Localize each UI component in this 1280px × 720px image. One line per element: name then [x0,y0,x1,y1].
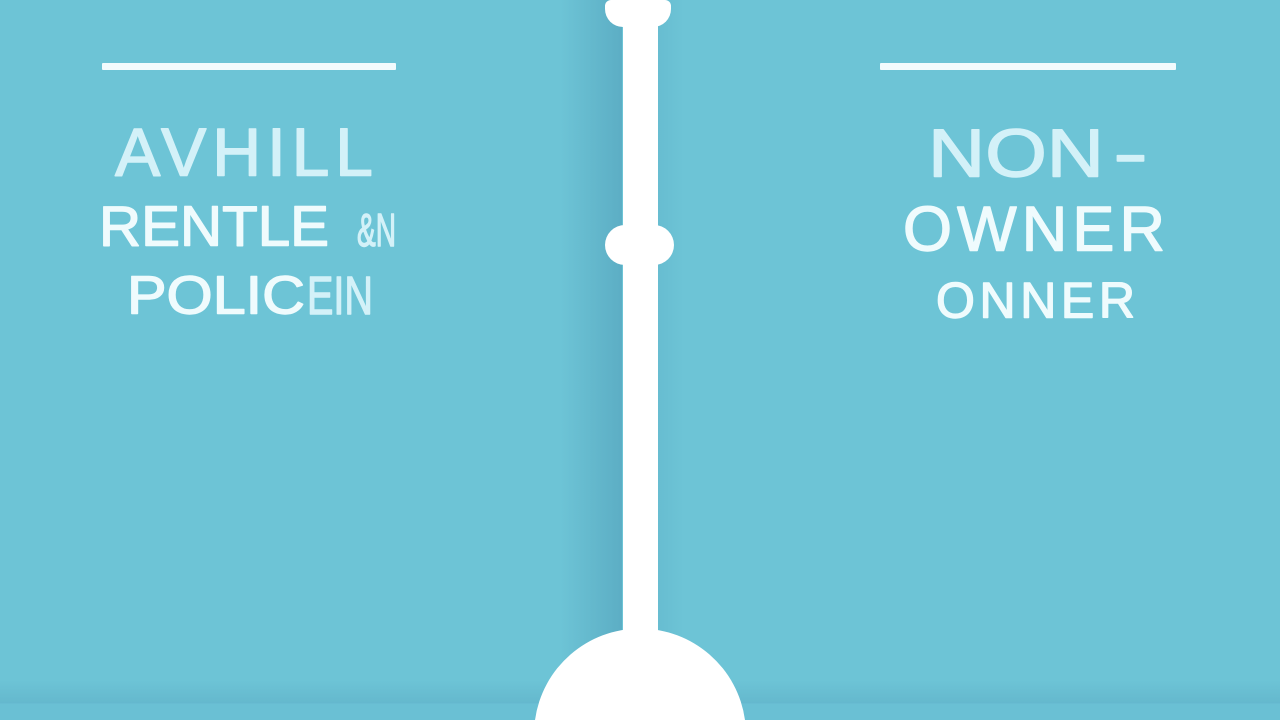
left heading line 3: POLIC [127,266,305,326]
bottom dome [535,630,745,720]
top knob [605,0,671,27]
right heading hyphen: - [1113,114,1148,192]
white pole with knobs and dome [535,0,745,720]
right heading line 1: NON [928,116,1104,192]
right heading line 2: OWNER [903,194,1165,264]
left heading line 1: AVHILL [115,114,373,190]
left heading garbled glyph: &N [357,204,396,256]
right heading line 3: ONNER [936,272,1135,328]
left rule [102,63,396,70]
left heading [99,114,396,326]
left heading garbled end: EIN [307,266,373,326]
pole [623,0,658,660]
centre shadow left [560,0,622,720]
left heading line 2: RENTLE [99,194,329,258]
bottom band [0,680,1280,720]
middle knob [605,225,674,265]
right heading [903,114,1165,328]
right rule [880,63,1176,70]
centre shadow right [658,0,684,720]
